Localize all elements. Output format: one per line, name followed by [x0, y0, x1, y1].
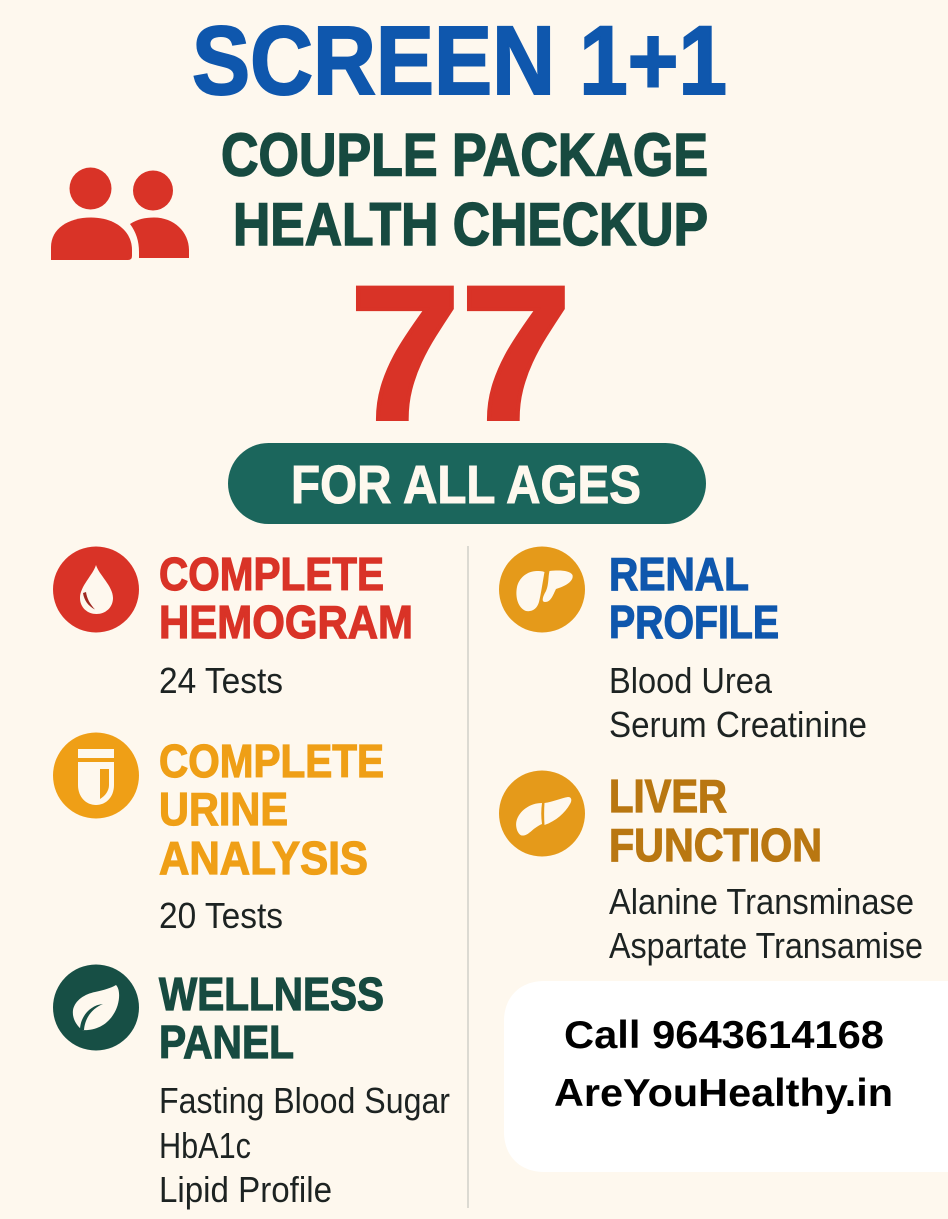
detail text: Fasting Blood Sugar: [159, 1080, 450, 1121]
icon: kidney: [499, 546, 585, 632]
panel: liver function: [499, 770, 923, 966]
subtitle: [221, 122, 708, 258]
badge: for all ages: FOR ALL AGES: [291, 455, 641, 515]
detail text: Alanine Transminase: [609, 881, 914, 922]
icon: blood drop: [53, 546, 139, 632]
heading: PANEL: [159, 1016, 294, 1068]
panel: complete hemogram: [53, 546, 413, 701]
heading: [159, 548, 413, 648]
icon: couple: [51, 168, 189, 260]
heading: [609, 548, 779, 648]
detail text: [609, 881, 923, 966]
subtitle: HEALTH CHECKUP: [233, 191, 708, 258]
icon: leaf: [53, 964, 139, 1050]
heading: [609, 770, 822, 871]
detail text: Lipid Profile: [159, 1169, 332, 1210]
badge: for all ages: [228, 443, 706, 524]
contact card: Call 9643614168: [564, 1014, 884, 1057]
panel: renal profile: [499, 546, 867, 745]
panel: complete urine analysis: [53, 732, 384, 936]
contact card: [504, 981, 948, 1172]
detail text: [609, 660, 867, 745]
detail text: 20 Tests: [159, 895, 283, 936]
subtitle: COUPLE PACKAGE: [221, 122, 708, 188]
detail text: HbA1c: [159, 1125, 251, 1166]
big number: 77: [350, 247, 572, 460]
panel: wellness panel: [53, 964, 450, 1210]
heading: WELLNESS: [159, 968, 384, 1020]
icon: urine cup: [53, 732, 139, 818]
heading: ANALYSIS: [159, 832, 368, 884]
heading: COMPLETE: [159, 735, 384, 787]
detail text: [159, 1080, 450, 1210]
heading: COMPLETE: [159, 548, 384, 600]
detail text: Blood Urea: [609, 660, 773, 701]
heading: PROFILE: [609, 596, 779, 648]
contact card: AreYouHealthy.in: [554, 1072, 893, 1115]
detail text: Serum Creatinine: [609, 704, 867, 745]
detail text: 24 Tests: [159, 660, 283, 701]
title: SCREEN 1+1: [192, 6, 727, 115]
heading: [159, 735, 384, 884]
heading: HEMOGRAM: [159, 596, 413, 648]
heading: URINE: [159, 783, 288, 835]
heading: [159, 968, 384, 1068]
heading: FUNCTION: [609, 819, 822, 871]
heading: RENAL: [609, 548, 749, 600]
icon: liver: [499, 770, 585, 856]
heading: LIVER: [609, 770, 727, 822]
